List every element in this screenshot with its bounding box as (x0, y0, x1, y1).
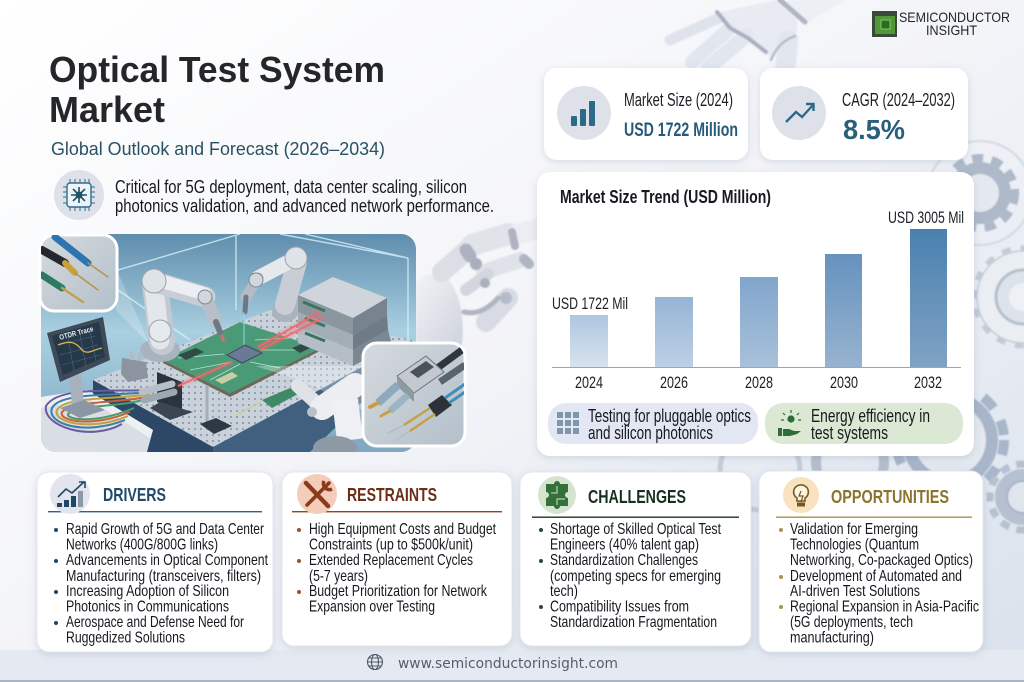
icon: hand with light (778, 410, 801, 436)
inset: test probes (40, 235, 117, 311)
bullet list: Expansion over Testing (309, 598, 435, 616)
bullet list (539, 521, 721, 631)
monitor: OTDR Trace (58, 324, 94, 342)
foreground robot hand (255, 366, 362, 460)
icon: globe (368, 654, 382, 670)
bullet list: Extended Replacement Cycles (309, 552, 473, 569)
bullet list: Manufacturing (transceivers, filters) (66, 568, 261, 585)
logo text: INSIGHT (926, 22, 977, 38)
bar chart: 2026 (660, 373, 688, 392)
bullet list: Advancements in Optical Component (66, 552, 268, 569)
bullet list: Budget Prioritization for Network (309, 583, 488, 600)
inset: optical transceivers (363, 343, 465, 446)
callout wedge (116, 274, 150, 344)
bullet list: Rapid Growth of 5G and Data Center (66, 521, 265, 538)
summary text (115, 177, 494, 216)
bar chart: 2024 (575, 373, 603, 392)
icon: rising bars (50, 474, 90, 514)
small board and probe (200, 385, 298, 434)
bar chart: 2032 (914, 373, 942, 392)
PCB (163, 322, 320, 397)
bullet list: (5-7 years) (309, 568, 368, 585)
title: Market (49, 89, 165, 130)
robot arm left (140, 269, 220, 362)
heading: OPPORTUNITIES (831, 486, 949, 507)
perforated table (93, 310, 412, 452)
chart title: Market Size Trend (USD Million) (560, 187, 771, 207)
pill text: Testing for pluggable optics (588, 406, 751, 426)
stat text: USD 1722 Million (624, 120, 738, 141)
panel: restraints (282, 472, 512, 646)
bullet list: Photonics in Communications (66, 598, 229, 616)
logo (872, 9, 1010, 38)
bullet list: Networks (400G/800G links) (66, 536, 218, 554)
icon: chip logo (872, 11, 897, 37)
bar chart: 2028 (745, 373, 773, 392)
stat text: CAGR (2024–2032) (842, 90, 955, 110)
heading: DRIVERS (103, 484, 166, 505)
icon: wrench and screwdriver (297, 474, 337, 514)
icon: photonic chip (54, 170, 104, 220)
illustration: automated optical test bench (40, 234, 465, 460)
stat text (842, 90, 955, 145)
bar chart: 2030 (830, 373, 858, 392)
bar chart (552, 208, 964, 392)
icon: light bulb (783, 477, 819, 513)
bullet list: AI-driven Test Solutions (790, 583, 920, 600)
bullet list: Networking, Co-packaged Optics) (790, 552, 973, 569)
panel: challenges (520, 472, 751, 646)
bullet list: Compatibility Issues from (550, 598, 689, 616)
bar chart: USD 3005 Mil (888, 208, 964, 227)
heading: CHALLENGES (588, 486, 686, 507)
robot hand middle (416, 226, 545, 345)
logo text: SEMICONDUCTOR (899, 9, 1010, 25)
pill: pluggable optics (548, 403, 758, 444)
icon: puzzle (538, 476, 576, 514)
monitor (47, 317, 110, 418)
pill: energy efficiency (765, 403, 963, 444)
stat text: Market Size (2024) (624, 90, 733, 110)
robot hand top (670, 0, 845, 72)
bullet list (297, 521, 496, 616)
icon: chip grid (557, 412, 579, 434)
bar chart: USD 1722 Mil (552, 294, 628, 313)
robot arm right (245, 247, 307, 322)
pill text (811, 406, 930, 443)
fiber cables (46, 390, 150, 432)
icon: growth arrow (772, 86, 826, 140)
pill text: test systems (811, 423, 888, 443)
bullet list: (competing specs for emerging (550, 568, 721, 585)
bullet list: Constraints (up to $500k/unit) (309, 536, 473, 554)
pill text: and silicon photonics (588, 423, 713, 443)
pill text: Energy efficiency in (811, 406, 930, 426)
desk (41, 390, 153, 452)
bullet list: Ruggedized Solutions (66, 630, 185, 646)
bullet list: manufacturing) (790, 630, 874, 646)
bullet list: Aerospace and Defense Need for (66, 614, 245, 631)
panel: drivers (37, 472, 273, 652)
summary (54, 170, 494, 220)
footer (368, 654, 618, 672)
summary text: photonics validation, and advanced network performance. (115, 196, 494, 216)
summary text: Critical for 5G deployment, data center scaling, silicon (115, 177, 467, 197)
subtitle: Global Outlook and Forecast (2026–2034) (51, 139, 385, 159)
title (49, 49, 385, 130)
bullet list: High Equipment Costs and Budget (309, 521, 496, 538)
glass enclosure (118, 234, 408, 342)
small instrument (121, 352, 148, 382)
icon: bar chart (557, 86, 611, 140)
bullet list: Shortage of Skilled Optical Test (550, 521, 721, 538)
bullet list: Development of Automated and (790, 568, 962, 585)
pill text (588, 406, 751, 443)
panel: opportunities (759, 471, 983, 652)
stat text: 8.5% (843, 114, 905, 145)
heading: RESTRAINTS (347, 484, 437, 505)
laser beams (178, 312, 322, 386)
rack instruments (298, 277, 392, 366)
bullet list: tech) (550, 583, 578, 600)
bullet list (779, 521, 979, 646)
stat card: market size (544, 68, 748, 160)
fiber mount (142, 372, 193, 420)
bullet list: Standardization Fragmentation (550, 614, 717, 631)
bullet list: Standardization Challenges (550, 552, 698, 569)
bullet list: (5G deployments, tech (790, 614, 913, 631)
stat text (624, 90, 738, 141)
bullet list (54, 521, 268, 646)
bullet list: Increasing Adoption of Silicon (66, 583, 229, 600)
bullet list: Engineers (40% talent gap) (550, 536, 699, 554)
bullet list: Technologies (Quantum (790, 536, 919, 554)
bullet list: Validation for Emerging (790, 521, 918, 538)
panel: market size trend (537, 172, 974, 456)
website: www.semiconductorinsight.com (398, 656, 618, 672)
background gears (720, 141, 1024, 530)
stat card: CAGR (760, 68, 968, 160)
logo text (899, 9, 1010, 38)
title: Optical Test System (49, 49, 385, 90)
